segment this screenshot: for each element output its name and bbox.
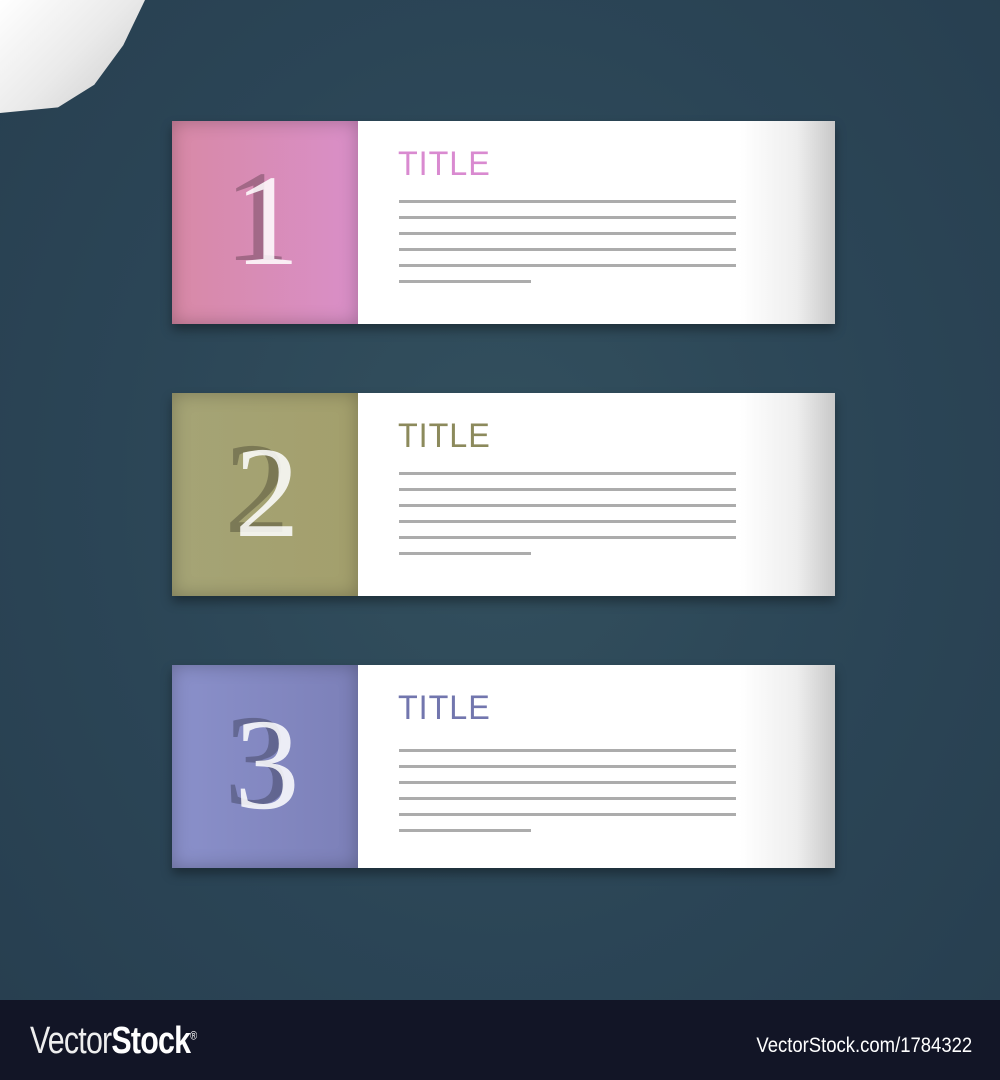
panel: card 1 <box>172 121 835 324</box>
panel: card 2 <box>172 393 835 596</box>
logo: VectorStock® <box>30 1020 196 1062</box>
number tile 3: 3 <box>234 693 300 837</box>
number tile 1: 1 <box>234 149 300 293</box>
text block 2: TITLE <box>398 417 491 455</box>
number tile 1 <box>172 121 358 324</box>
footer bar <box>0 1000 1000 1080</box>
number tile 2: 2 <box>234 421 300 565</box>
text block 1: TITLE <box>398 145 491 183</box>
text block 1 <box>358 121 835 324</box>
url: VectorStock.com/1784322 <box>756 1034 972 1057</box>
text block 3: TITLE <box>398 689 491 727</box>
number tile 3 <box>172 665 358 868</box>
icon: page curl <box>0 0 145 113</box>
number tile 2 <box>172 393 358 596</box>
panel: card 3 <box>172 665 835 868</box>
text block 3 <box>358 665 835 868</box>
text block 2 <box>358 393 835 596</box>
